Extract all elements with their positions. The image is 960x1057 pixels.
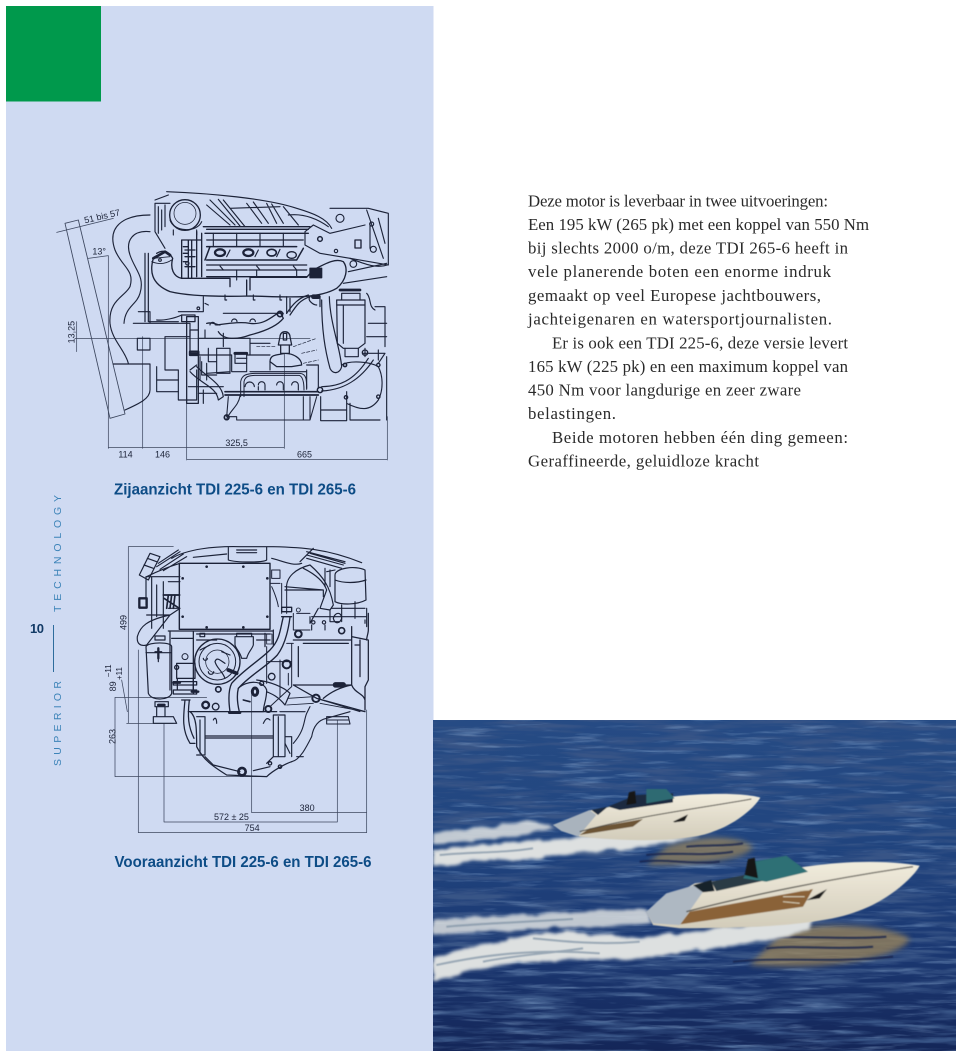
hoses left xyxy=(110,215,150,363)
photo: two speedboats on water xyxy=(433,720,956,1051)
cylinder head details xyxy=(205,247,303,260)
side view engine drawing xyxy=(57,192,388,460)
housing lower right xyxy=(321,348,387,421)
right housing xyxy=(293,613,368,712)
front boat xyxy=(646,856,920,928)
green square xyxy=(6,6,101,102)
centre block parts xyxy=(182,315,198,403)
compressor xyxy=(195,639,240,684)
dimension labels front view: 263 xyxy=(107,729,117,744)
body text: vele planerende boten een enorme indruk xyxy=(528,262,832,281)
caption side view: Zijaanzicht TDI 225-6 en TDI 265-6 xyxy=(114,482,356,498)
bar below plate xyxy=(168,630,273,693)
dimension labels side view: 325,5 xyxy=(225,438,248,448)
upper centre right xyxy=(270,570,310,630)
dimension labels front view: 754 xyxy=(245,823,260,833)
background panel xyxy=(6,6,434,1051)
oil pipe centre xyxy=(207,295,310,338)
dimension labels side view: 665 xyxy=(297,450,312,460)
sea xyxy=(433,720,956,1051)
body text: bij slechts 2000 o/m, deze TDI 265-6 heeft in xyxy=(528,239,849,258)
dimension labels front view: 89 xyxy=(108,681,118,691)
front view engine drawing xyxy=(104,547,368,833)
dimension labels front view xyxy=(104,615,315,833)
small bolts xyxy=(157,295,287,320)
body text: Deze motor is leverbaar in twee uitvoeringen: xyxy=(528,192,828,210)
body text: jachteigenaren en watersportjournalisten. xyxy=(527,309,832,328)
dimension labels front view: −11 xyxy=(104,664,113,677)
outer tube with loops xyxy=(241,373,307,397)
oil filter xyxy=(337,300,365,348)
body text: gemaakt op veel Europese jachtbouwers, xyxy=(528,286,821,305)
dimension labels side view: 146 xyxy=(155,450,170,460)
dimension labels side view xyxy=(67,207,312,460)
body text: Er is ook een TDI 225-6, deze versie levert xyxy=(552,333,848,352)
right reservoir xyxy=(335,568,366,604)
dimension labels side view: 51 bis 57 xyxy=(83,207,121,225)
body text: Geraffineerde, geluidloze kracht xyxy=(528,451,759,470)
top cover xyxy=(155,192,332,228)
vertical section label xyxy=(52,495,64,766)
left side turbo xyxy=(137,577,180,645)
valve cover plate xyxy=(179,563,270,629)
right engine foot xyxy=(292,707,350,762)
dimension labels side view: 114 xyxy=(118,450,133,460)
dimension labels side view: 13° xyxy=(92,247,106,257)
air filter xyxy=(170,200,200,230)
dimension lines front view xyxy=(115,547,367,833)
body text: 165 kW (225 pk) en een maximum koppel van xyxy=(528,357,849,376)
reflections xyxy=(646,838,910,967)
superior label: SUPERIOR xyxy=(52,681,64,766)
right bracket xyxy=(305,208,388,265)
dimension labels front view: 499 xyxy=(119,615,129,630)
centre thermostat xyxy=(173,663,197,743)
body text: Een 195 kW (265 pk) met een koppel van 550 Nm xyxy=(528,215,869,234)
dimension labels side view: 13,25 xyxy=(67,321,77,343)
dimension labels front view: 572 ± 25 xyxy=(214,812,249,822)
pump disc and hoses xyxy=(238,680,290,712)
diagonal tube xyxy=(188,365,223,403)
body text: belastingen. xyxy=(528,404,616,423)
body text xyxy=(527,192,869,470)
back boat xyxy=(553,789,760,840)
dimension labels front view: +11 xyxy=(115,666,124,680)
body text: Beide motoren hebben één ding gemeen: xyxy=(552,428,848,447)
engine mount xyxy=(270,332,302,367)
page number: 10 xyxy=(30,621,44,636)
technology label: TECHNOLOGY xyxy=(52,495,64,612)
left filter canister xyxy=(146,636,172,699)
vertical coolant pipe xyxy=(290,297,342,373)
dimension lines side view xyxy=(57,218,387,460)
sump xyxy=(225,392,318,395)
top cover front xyxy=(147,547,362,577)
turbo pipe xyxy=(152,251,346,297)
body text: 450 Nm voor langdurige en zeer zware xyxy=(528,381,801,400)
caption front view: Vooraanzicht TDI 225-6 en TDI 265-6 xyxy=(114,854,372,871)
main tube curving xyxy=(229,607,292,712)
lower sump xyxy=(188,712,292,777)
dimension labels front view: 380 xyxy=(300,803,315,813)
wakes xyxy=(433,820,813,980)
